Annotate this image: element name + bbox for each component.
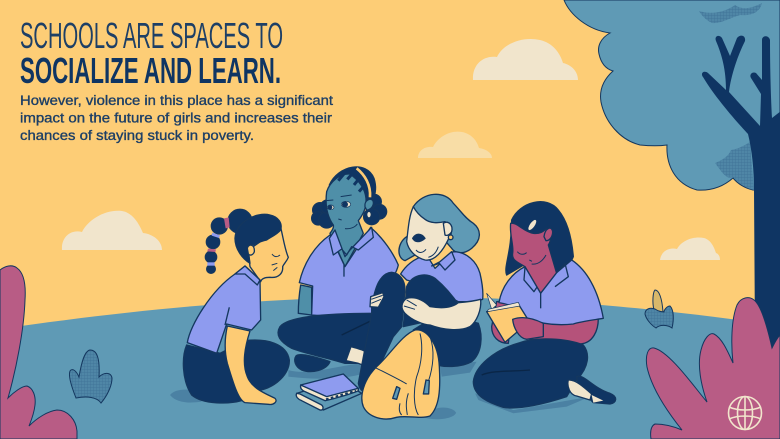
body text: However, violence in this place has a significant [20, 93, 333, 108]
foliage trunk shade [715, 142, 754, 190]
hair back [506, 202, 573, 275]
shirt collar [524, 263, 568, 292]
arm and hand [402, 298, 481, 330]
ear [443, 222, 452, 235]
shirt [499, 260, 603, 325]
tree trunk and branches [702, 36, 780, 439]
shirt [187, 266, 261, 353]
hand [513, 318, 543, 339]
trousers [183, 340, 289, 403]
trousers [473, 339, 587, 408]
zip pulls [393, 387, 400, 399]
plant: left small [69, 350, 112, 403]
ponytail [205, 209, 252, 273]
body text: chances of staying stuck in poverty. [20, 128, 254, 143]
trousers body [413, 313, 481, 366]
hair back [399, 194, 479, 261]
ear [544, 228, 553, 241]
eyes and mouth [326, 195, 357, 229]
shirt collar [329, 227, 373, 257]
hair clip [527, 219, 538, 231]
hair braids and band [338, 168, 370, 197]
far arm [492, 300, 513, 343]
hair puffs [312, 194, 387, 228]
icon: globe logo [728, 396, 762, 430]
cloud: middle faint [418, 132, 492, 158]
shadow [475, 393, 590, 413]
ear [247, 245, 254, 255]
bush: left pink [0, 266, 77, 439]
lower book [297, 380, 362, 410]
title line 1: SCHOOLS ARE SPACES TO [20, 15, 283, 56]
tree [564, 0, 780, 439]
eye and mouth [413, 234, 425, 242]
sock [346, 347, 372, 365]
foliage top shade [699, 3, 762, 23]
backpack shadow [423, 407, 456, 419]
body text: impact on the future of girls and increases their [20, 110, 333, 126]
cloud: left [62, 211, 162, 250]
pack seams [373, 333, 433, 415]
arm [298, 285, 312, 315]
foot [295, 355, 330, 372]
hair top [329, 167, 376, 200]
girl 1: yellow skin, ponytail [170, 209, 289, 404]
shadow [440, 362, 477, 377]
books [296, 374, 362, 410]
face [510, 223, 557, 293]
plant: right small [645, 290, 673, 328]
girl 2: teal skin, hairband [278, 167, 398, 379]
shirt [401, 252, 483, 302]
leg: left knee [358, 272, 405, 392]
tree foliage [564, 0, 780, 190]
shadow [288, 363, 367, 379]
ground hill [0, 297, 780, 439]
girl 3: cream skin, teal hair [358, 194, 483, 392]
leg: right knee [403, 275, 460, 327]
head and neck [326, 174, 366, 267]
shirt [299, 227, 398, 316]
girl 4: magenta skin, reading [473, 202, 616, 413]
crossed legs [278, 313, 377, 363]
title line 2: SOCIALIZE AND LEARN. [20, 50, 281, 91]
backpack [362, 330, 456, 419]
face [407, 207, 451, 260]
face details [517, 252, 546, 264]
bush: right pink [646, 298, 780, 439]
arm [225, 326, 276, 404]
ground shadow [170, 389, 202, 403]
upper book [301, 374, 358, 398]
hair [235, 214, 281, 263]
far hand fingers [370, 293, 384, 307]
cloud: top [473, 39, 578, 80]
book [487, 293, 497, 309]
face lines [272, 254, 280, 271]
foot [577, 376, 616, 404]
cloud: right [660, 237, 720, 260]
ear and earring [365, 199, 373, 210]
neck and head [248, 227, 288, 282]
near arm [527, 318, 598, 344]
